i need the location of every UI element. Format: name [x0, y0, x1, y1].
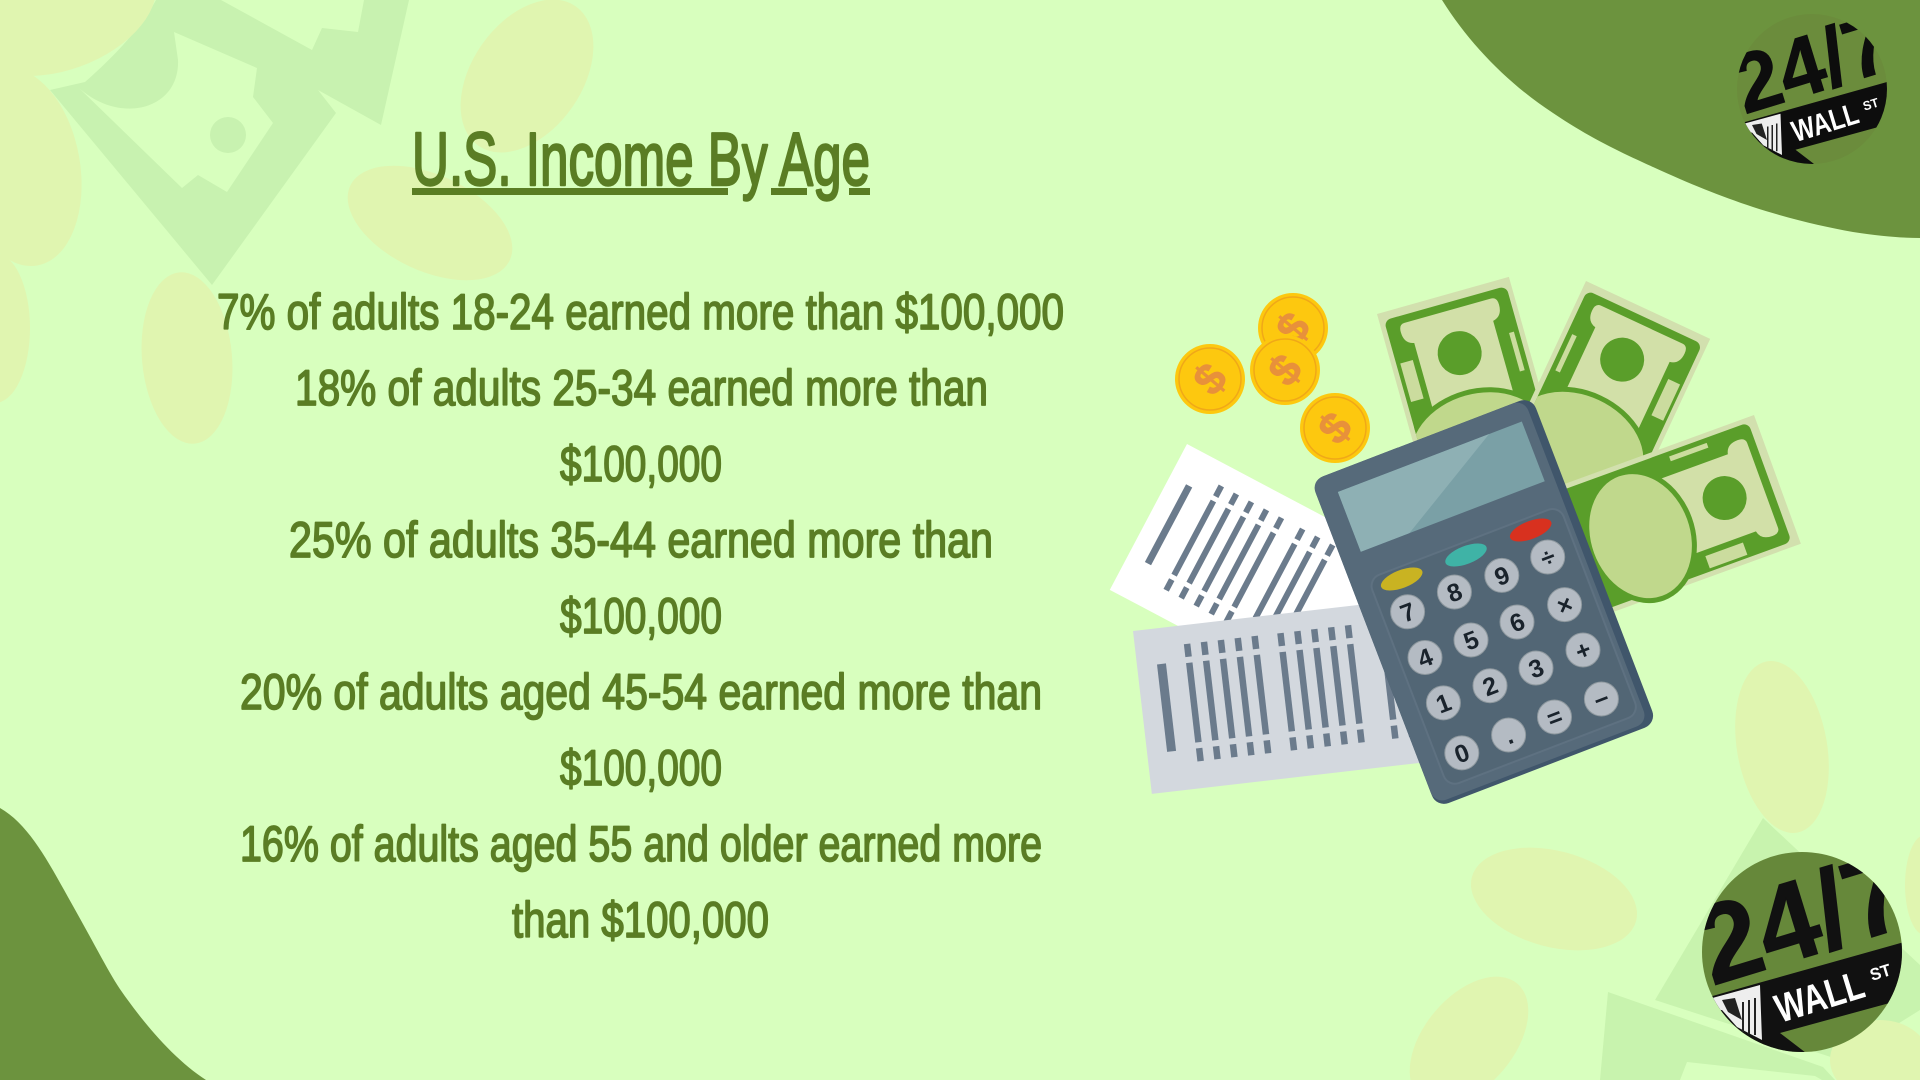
- icon: gold coins: $: [1184, 354, 1237, 404]
- text block: income statistics: 18% of adults 25-34 earned more than: [295, 360, 988, 416]
- icon: banknote left: [1377, 277, 1538, 442]
- calculator keys: 5: [1460, 625, 1483, 656]
- calculator keys: +: [1572, 635, 1595, 667]
- icon: calculator: [1311, 396, 1657, 808]
- calculator body: [1311, 396, 1657, 808]
- text block: income statistics: [217, 284, 1064, 948]
- text block: income statistics: than $100,000: [512, 892, 769, 948]
- calculator keys: ×: [1553, 590, 1577, 621]
- calculator keys: 6: [1506, 607, 1529, 638]
- calculator keys: .: [1501, 722, 1517, 750]
- logo bottom right: ST: [1868, 960, 1894, 985]
- calculator keys: 3: [1525, 653, 1548, 684]
- text block: income statistics: 25% of adults 35-44 earned more than: [289, 512, 993, 568]
- icon: banknote right: [1486, 415, 1802, 645]
- corner blob top right: [1442, 0, 1920, 238]
- corner blob bottom left: [0, 808, 206, 1080]
- text block: income statistics: $100,000: [560, 588, 722, 644]
- logo bottom right: WALL: [1770, 963, 1870, 1032]
- title: [412, 117, 870, 201]
- calculator keys: =: [1543, 702, 1567, 734]
- text block: income statistics: 20% of adults aged 45-54 earned more than: [240, 664, 1042, 720]
- text block: income statistics: 7% of adults 18-24 earned more than $100,000: [217, 284, 1064, 340]
- faint background bill bottom right: [1600, 818, 1920, 1080]
- calculator keys: ÷: [1537, 542, 1560, 573]
- icon: white receipt: [1110, 444, 1417, 711]
- calculator colour buttons: [1378, 514, 1554, 595]
- logo top right: WALL: [1788, 97, 1863, 149]
- icon: grey receipt: [1133, 597, 1450, 794]
- calculator keys: 2: [1479, 671, 1502, 702]
- illustration: money and calculator: [1110, 277, 1802, 808]
- calculator keys: 1: [1432, 688, 1455, 719]
- icon: gold coins: [1175, 293, 1370, 463]
- logo bottom right: [1702, 852, 1902, 1052]
- faint background bill top left: [50, 0, 409, 285]
- icon: gold coins: $: [1309, 403, 1362, 453]
- logo top right: [1738, 22, 1887, 164]
- calculator keys: 8: [1443, 577, 1466, 608]
- calculator keys: 9: [1491, 561, 1514, 592]
- logo top right: ST: [1861, 95, 1881, 114]
- title: U.S. Income By Age: [412, 117, 870, 201]
- text block: income statistics: 16% of adults aged 55 and older earned more: [240, 816, 1042, 872]
- icon: gold coins: $: [1267, 303, 1320, 353]
- calculator keys: 4: [1414, 643, 1437, 674]
- calculator keys: 7: [1396, 597, 1419, 628]
- text block: income statistics: $100,000: [560, 436, 722, 492]
- icon: banknote middle: [1530, 281, 1710, 484]
- calculator keys: [1391, 540, 1618, 770]
- calculator keys: 0: [1451, 738, 1474, 769]
- calculator keys: −: [1590, 684, 1614, 716]
- text block: income statistics: $100,000: [560, 740, 722, 796]
- icon: gold coins: $: [1259, 345, 1312, 395]
